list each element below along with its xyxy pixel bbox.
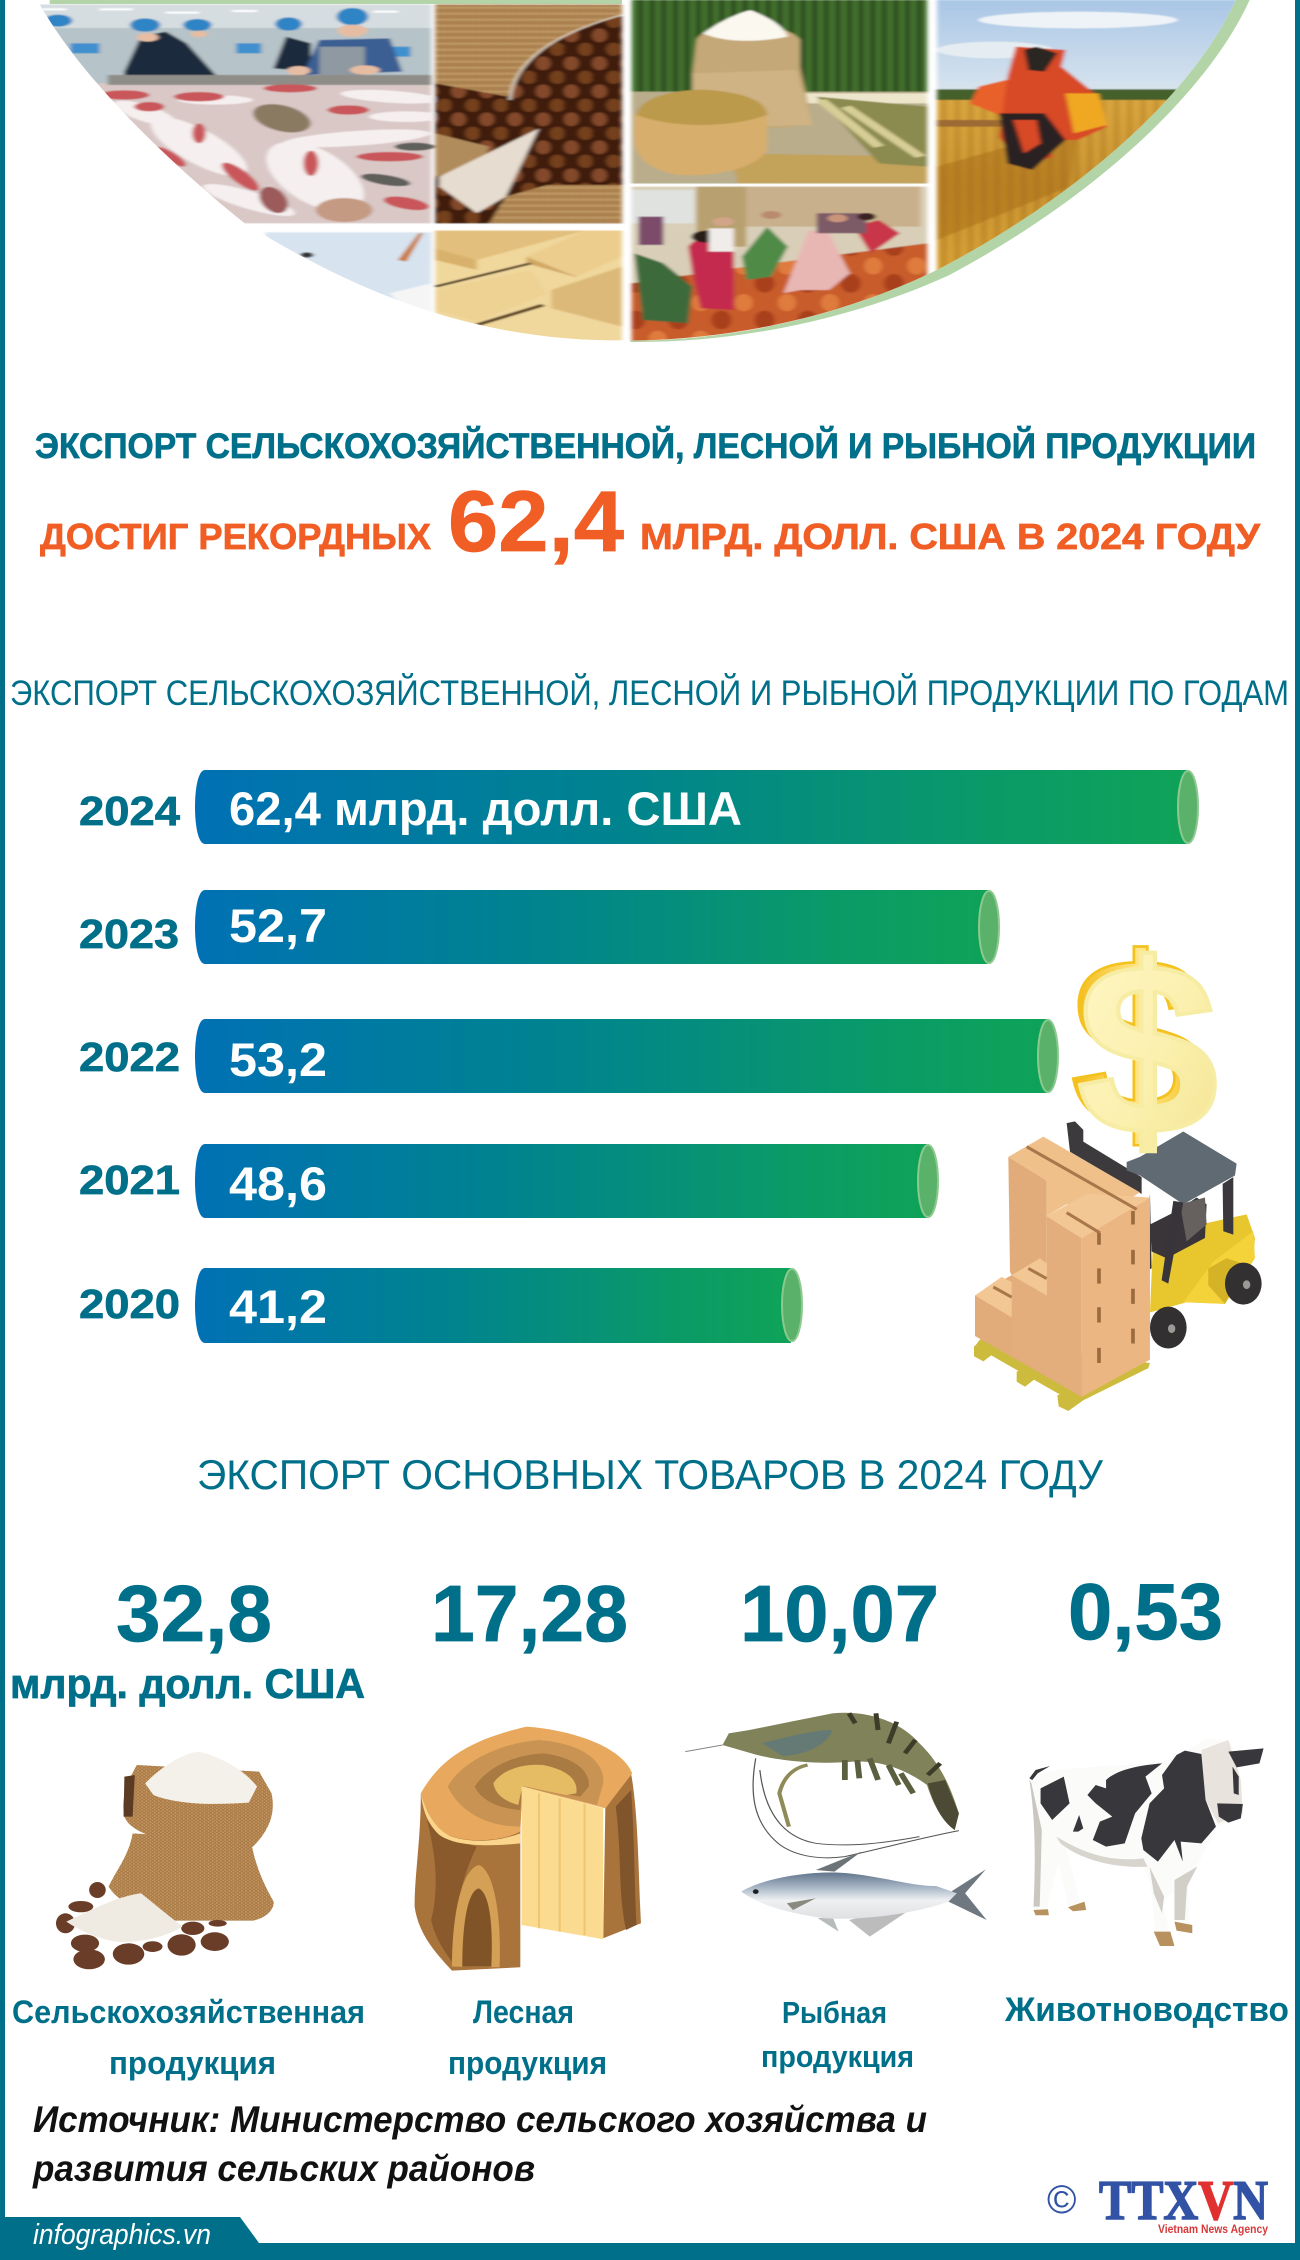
photo: coffee and burlap <box>435 5 622 223</box>
label: agricultural: Сельскохозяйственная <box>12 1994 365 2030</box>
title line 2 <box>40 474 1261 570</box>
source note: развития сельских районов <box>32 2148 535 2189</box>
bar chart <box>79 770 1198 1343</box>
bar 2023: 52,7 <box>229 899 327 952</box>
footer site label: infographics.vn <box>33 2219 211 2251</box>
label: agricultural: продукция <box>109 2045 276 2081</box>
photo collage <box>33 0 1252 342</box>
icon: stacked boxes <box>975 1137 1150 1397</box>
title line 1: ЭКСПОРТ СЕЛЬСКОХОЗЯЙСТВЕННОЙ, ЛЕСНОЙ И РЫБНОЙ ПРОДУКЦИИ <box>35 426 1256 466</box>
bar 2021: 48,6 <box>229 1157 327 1210</box>
bar 2024: 2024 <box>79 788 180 834</box>
green rim of the collage <box>50 0 1250 342</box>
bar 2022: 53,2 <box>229 1033 327 1086</box>
title line 2: ДОСТИГ РЕКОРДНЫХ <box>40 516 431 557</box>
icon: shrimp <box>685 1713 959 1858</box>
icon: catfish <box>741 1852 987 1937</box>
label: forestry: продукция <box>448 2045 607 2081</box>
bar 2021 <box>79 1144 938 1218</box>
source note <box>32 2099 927 2189</box>
category labels <box>12 1991 1289 2081</box>
photo: glass-wall factory detail <box>265 232 431 312</box>
heading: main goods: ЭКСПОРТ ОСНОВНЫХ ТОВАРОВ В 2024 ГОДУ <box>197 1451 1103 1498</box>
icon: pallet <box>974 1339 1150 1411</box>
title line 2: 62,4 <box>448 474 624 570</box>
icon: tree stump <box>415 1727 641 1971</box>
label: fishery: Рыбная <box>782 1995 887 2030</box>
photo: sawn timber <box>435 231 622 341</box>
stat: forestry products: 17,28 <box>431 1569 628 1658</box>
stat: agricultural products <box>10 1569 365 1707</box>
logo: TTXVN: Vietnam News Agency <box>1158 2222 1268 2236</box>
unit label: млрд. долл. США <box>10 1660 365 1707</box>
bar 2023: 2023 <box>79 911 179 957</box>
label: fishery: продукция <box>761 2039 914 2074</box>
bar 2024 <box>79 770 1198 844</box>
icon: dollar sign: $ <box>1077 914 1218 1186</box>
photo: fish processing line <box>33 5 444 223</box>
icon: cow <box>1029 1738 1264 1946</box>
bar 2021: 2021 <box>79 1157 180 1203</box>
label: forestry: Лесная <box>473 1994 574 2030</box>
main title <box>35 426 1261 570</box>
bar 2023 <box>79 890 999 964</box>
logo: TTXVN: © <box>1047 2178 1076 2222</box>
logo: TTXVN: TTXVN <box>1099 2170 1268 2232</box>
icon: sack with coffee beans <box>56 1752 274 1969</box>
label: livestock: Животноводство <box>1004 1991 1289 2029</box>
photo: rice harvester in field <box>937 0 1252 280</box>
label: fishery <box>761 1995 914 2074</box>
icon: forklift with boxes and dollar sign <box>974 908 1262 1411</box>
bar 2024: 62,4 млрд. долл. США <box>229 782 742 835</box>
collage photos <box>33 0 1252 342</box>
photo: lychee harvest workers <box>632 187 927 342</box>
bar 2022: 2022 <box>79 1034 180 1080</box>
label: agricultural <box>12 1994 365 2081</box>
title line 2: МЛРД. ДОЛЛ. США В 2024 ГОДУ <box>640 516 1261 557</box>
icon: forklift <box>1067 1121 1262 1349</box>
source note: Источник: Министерство сельского хозяйства и <box>33 2099 927 2140</box>
icon: dollar sign: $ <box>1070 908 1210 1179</box>
stat: fishery products: 10,07 <box>740 1569 939 1658</box>
bar 2022 <box>79 1019 1058 1093</box>
bar 2020: 2020 <box>79 1281 180 1327</box>
photo: grain sack and bowl <box>632 0 927 183</box>
stat: agricultural products: 32,8 <box>116 1569 272 1658</box>
bar 2020: 41,2 <box>229 1280 327 1333</box>
stat: livestock: 0,53 <box>1068 1567 1223 1656</box>
bar 2020 <box>79 1268 802 1343</box>
label: forestry <box>448 1994 607 2081</box>
